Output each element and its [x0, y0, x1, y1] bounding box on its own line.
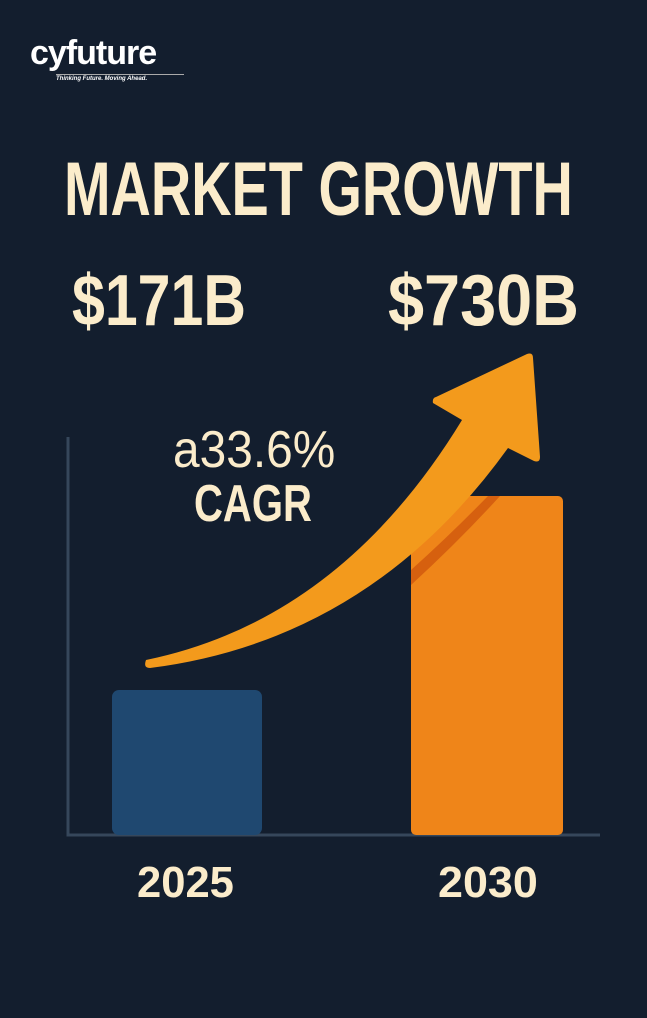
logo: cyfuture [30, 34, 156, 72]
logo: Thinking Future. Moving Ahead. [56, 76, 147, 82]
bar 2025 [112, 690, 262, 835]
value 2025: $171B [72, 261, 246, 341]
title: MARKET GROWTH [64, 147, 573, 232]
arrow [145, 354, 540, 668]
CAGR label: a33.6% [173, 421, 335, 479]
value 2030: $730B [388, 261, 579, 341]
label 2030: 2030 [438, 858, 538, 907]
label 2025: 2025 [137, 858, 234, 907]
axes [68, 437, 600, 835]
CAGR label: CAGR [194, 475, 312, 533]
bar 2030 [411, 496, 563, 835]
CAGR label [173, 421, 335, 533]
logo [30, 34, 184, 82]
